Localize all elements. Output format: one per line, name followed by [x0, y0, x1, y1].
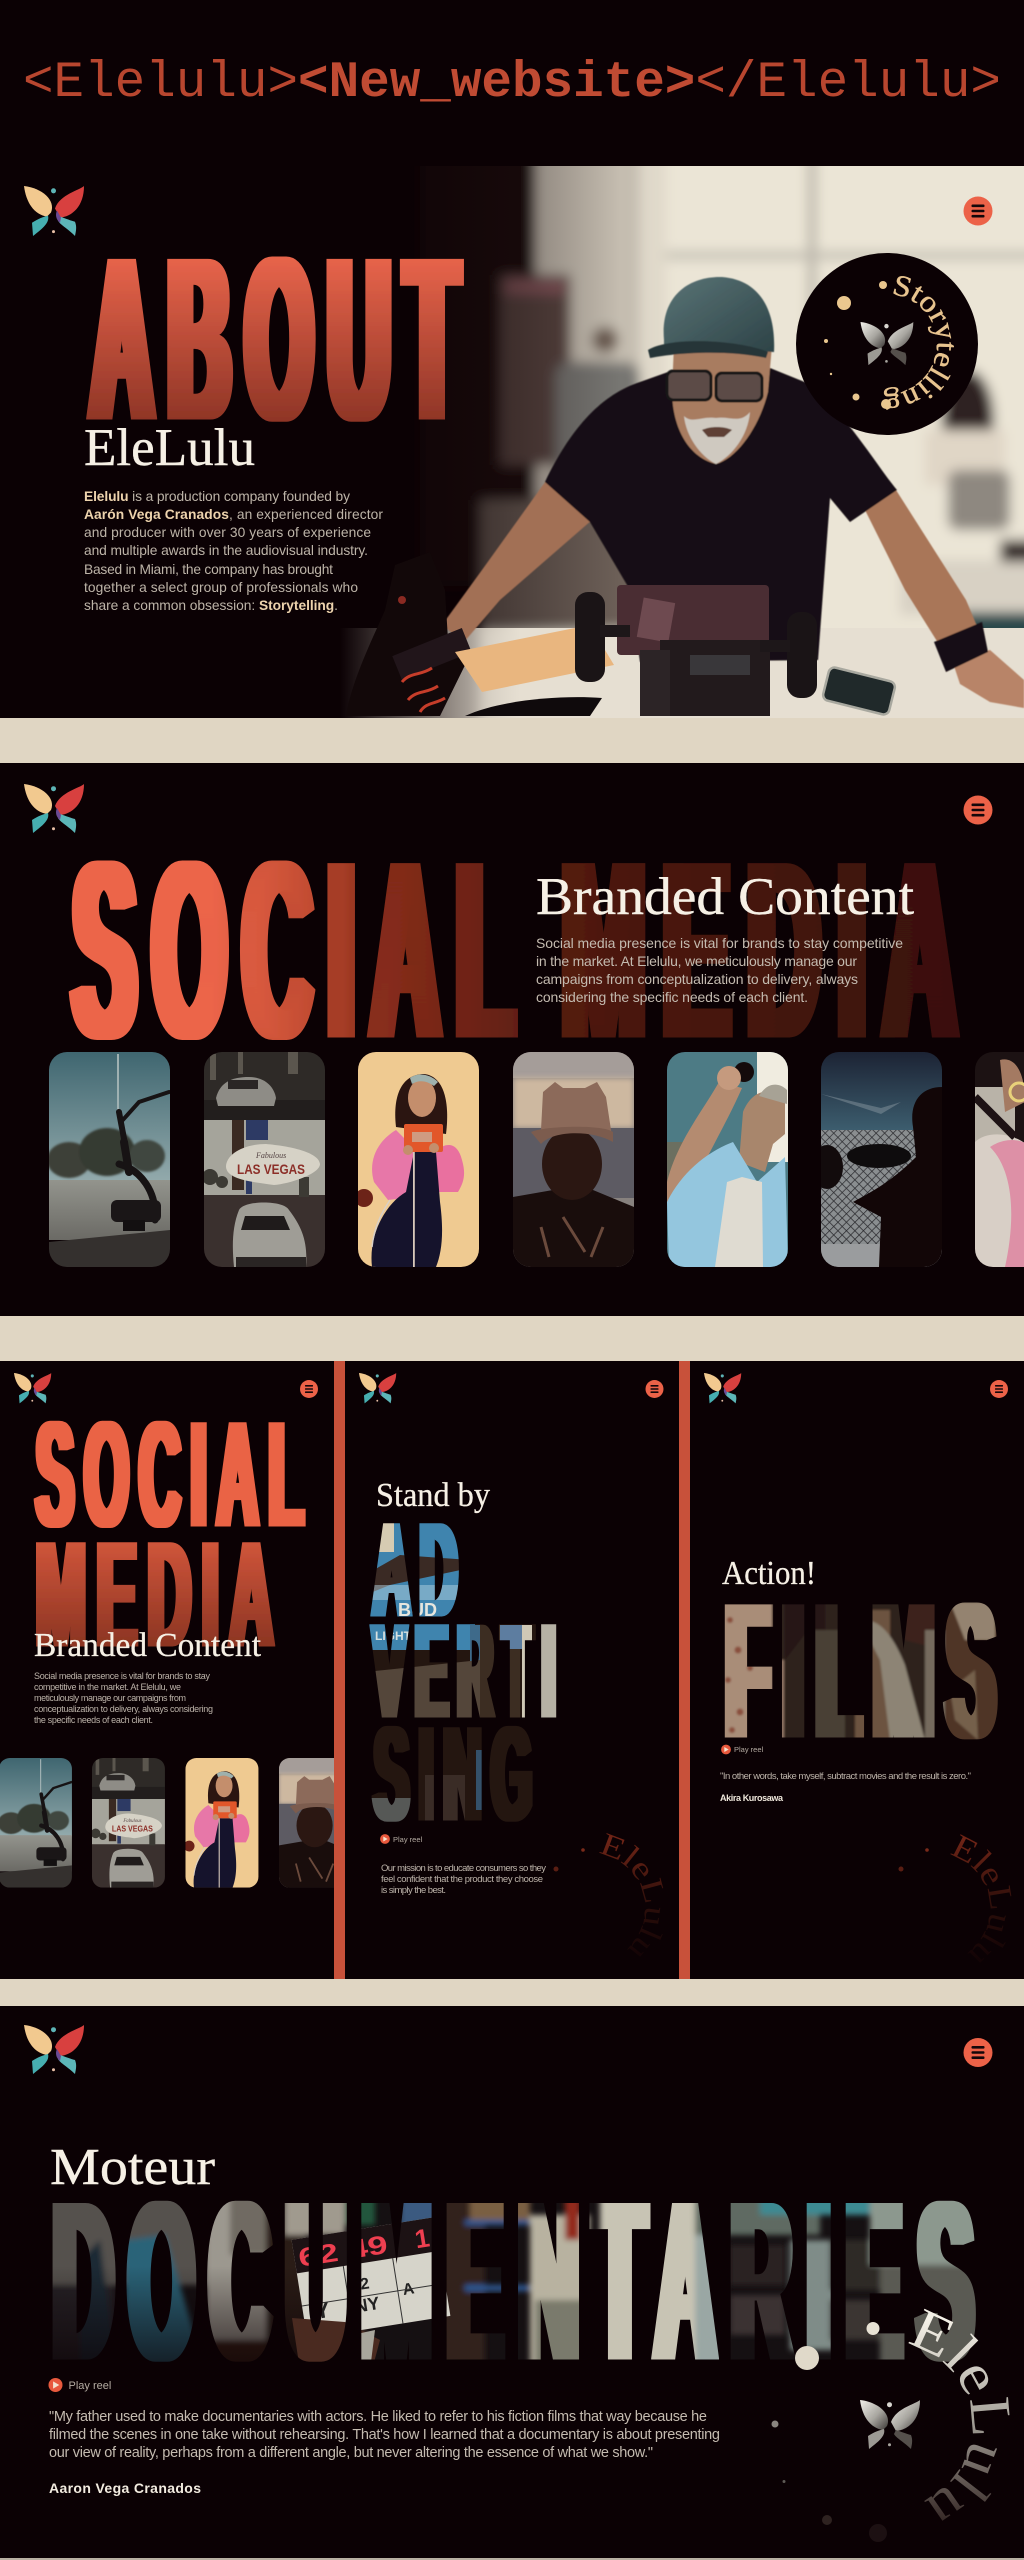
- photo: blurred studio background: [454, 166, 1024, 718]
- quote: [49, 2409, 720, 2461]
- play reel: Play reel: [393, 1835, 423, 1844]
- panel: about hero: [24, 166, 1024, 718]
- card: man in blue shirt: [667, 1052, 788, 1267]
- paragraph: is simply the best.: [381, 1885, 446, 1896]
- menu button: [646, 1380, 663, 1398]
- divider bar: [679, 1361, 690, 1979]
- badge butterfly: [860, 322, 913, 365]
- card: fence silhouette: [811, 1052, 942, 1267]
- heading: Stand by: Stand by: [376, 1477, 490, 1514]
- circular EleLulu mark: [898, 1834, 1012, 1958]
- band: [0, 718, 1024, 763]
- bottom band: [0, 2558, 1024, 2560]
- menu button: [964, 796, 992, 824]
- circular EleLulu mark: EleLulu: [908, 2308, 1010, 2520]
- quote: our view of reality, perhaps from a different angle, but never altering the essence of what we show.": [49, 2445, 653, 2461]
- panel: social media branded content: [24, 784, 1024, 1267]
- circular EleLulu mark: [554, 1833, 664, 1956]
- card: partial portrait: [975, 1052, 1024, 1267]
- paragraph: Social media presence is vital for brands to stay competitive: [536, 935, 903, 951]
- badge dots: [824, 281, 891, 409]
- storytelling badge: [796, 253, 978, 435]
- panel: documentaries: [24, 2025, 1010, 2542]
- photo: monitor rig: [575, 585, 817, 716]
- logo: [704, 1373, 741, 1403]
- paragraph: in the market. At Elelulu, we meticulously manage our: [536, 953, 857, 969]
- photo: pouch: [465, 697, 602, 716]
- quote author: Aaron Vega Cranados: [49, 2480, 201, 2496]
- about paragraph: Elelulu is a production company founded by: [84, 489, 350, 504]
- heading: EleLulu: EleLulu: [84, 419, 255, 477]
- band: [0, 1979, 1024, 2006]
- title: <Elelulu><New_website></Elelulu>: [23, 55, 1001, 112]
- logo: [359, 1373, 396, 1403]
- play reel: Play reel: [734, 1745, 764, 1754]
- screen 1: social media: [0, 1373, 352, 1888]
- play reel: [48, 2378, 111, 2392]
- photo: phone: [822, 666, 896, 716]
- paragraph: meticulously manage our campaigns from: [34, 1693, 186, 1703]
- card: woman with candy bag: [355, 1052, 479, 1267]
- paragraph: [381, 1863, 546, 1896]
- quote author: Akira Kurosawa: [720, 1793, 784, 1803]
- quote: "My father used to make documentaries with actors. He liked to refer to his fiction films that way because he: [49, 2409, 707, 2425]
- play reel: Play reel: [68, 2380, 111, 2392]
- paragraph: the specific needs of each client.: [34, 1715, 153, 1725]
- photo: left dark fade: [426, 166, 606, 718]
- image-filled word: DOCUMENTARIES: [40, 2195, 1024, 2370]
- about paragraph: [84, 489, 383, 613]
- play reel: [721, 1745, 764, 1754]
- screen 2: advertising: [359, 1373, 664, 1956]
- circular EleLulu mark: EleLulu: [950, 1834, 1012, 1958]
- about paragraph: share a common obsession: Storytelling.: [84, 598, 338, 613]
- heading: Action!: Action!: [722, 1555, 816, 1592]
- about paragraph: Based in Miami, the company has brought: [84, 562, 333, 577]
- band: [0, 1316, 1024, 1361]
- photo: table: [340, 628, 1024, 718]
- about paragraph: together a select group of professionals who: [84, 580, 358, 595]
- photo: man: [442, 277, 1024, 708]
- panel: three phone screens: [0, 1361, 1012, 1979]
- menu button: [990, 1380, 1008, 1398]
- screen 3: films: [704, 1373, 1012, 1958]
- card strip: [0, 1758, 352, 1888]
- card: camera crane: [47, 1052, 170, 1267]
- logo: [24, 186, 84, 236]
- paragraph: campaigns from conceptualization to delivery, always: [536, 971, 858, 987]
- paragraph: Our mission is to educate consumers so they: [381, 1863, 546, 1874]
- heading: Branded Content: Branded Content: [536, 868, 914, 926]
- card: woman in hat: [513, 1052, 634, 1267]
- about paragraph: and producer with over 30 years of experience: [84, 525, 371, 540]
- paragraph: [34, 1671, 213, 1725]
- panel: three phone screens: SOCIAL: [36, 1390, 314, 1558]
- menu button: [300, 1380, 318, 1398]
- paragraph: Social media presence is vital for brands to stay: [34, 1671, 210, 1681]
- menu button: [964, 196, 992, 226]
- paragraph: feel confident that the product they choose: [381, 1874, 543, 1885]
- quote: "In other words, take myself, subtract movies and the result is zero.": [720, 1771, 971, 1782]
- card: Las Vegas: [202, 1052, 325, 1267]
- badge text: Storytelling: [884, 276, 954, 410]
- heading: Branded Content: Branded Content: [34, 1627, 262, 1664]
- image-filled word: FILMS: [715, 1595, 1005, 1745]
- menu button: [964, 2038, 992, 2067]
- about paragraph: Aarón Vega Cranados, an experienced director: [84, 507, 383, 522]
- quote: filmed the scenes in one take without rehearsing. That's how I learned that a documentary is about presenting: [49, 2427, 720, 2443]
- divider bar: [334, 1361, 345, 1979]
- paragraph: conceptualization to delivery, always considering: [34, 1704, 213, 1714]
- logo: [14, 1373, 51, 1403]
- paragraph: [536, 935, 903, 1005]
- paragraph: considering the specific needs of each client.: [536, 989, 808, 1005]
- paragraph: competitive in the market. At Elelulu, we: [34, 1682, 181, 1692]
- image-filled word: ADVERTISING: [365, 1515, 565, 1825]
- about paragraph: and multiple awards in the audiovisual industry.: [84, 543, 368, 558]
- circular EleLulu mark: EleLulu: [599, 1833, 664, 1956]
- play reel: [380, 1834, 423, 1844]
- photo cards: [47, 1052, 1024, 1267]
- heading: Moteur: Moteur: [50, 2139, 215, 2196]
- logo: [24, 784, 84, 833]
- logo: [24, 2025, 84, 2074]
- screen 1: social media: MEDIA: [36, 1510, 284, 1678]
- photo: camera rig left: [352, 596, 470, 716]
- photo: notepad: [455, 625, 614, 692]
- circular EleLulu mark: [772, 2308, 1010, 2542]
